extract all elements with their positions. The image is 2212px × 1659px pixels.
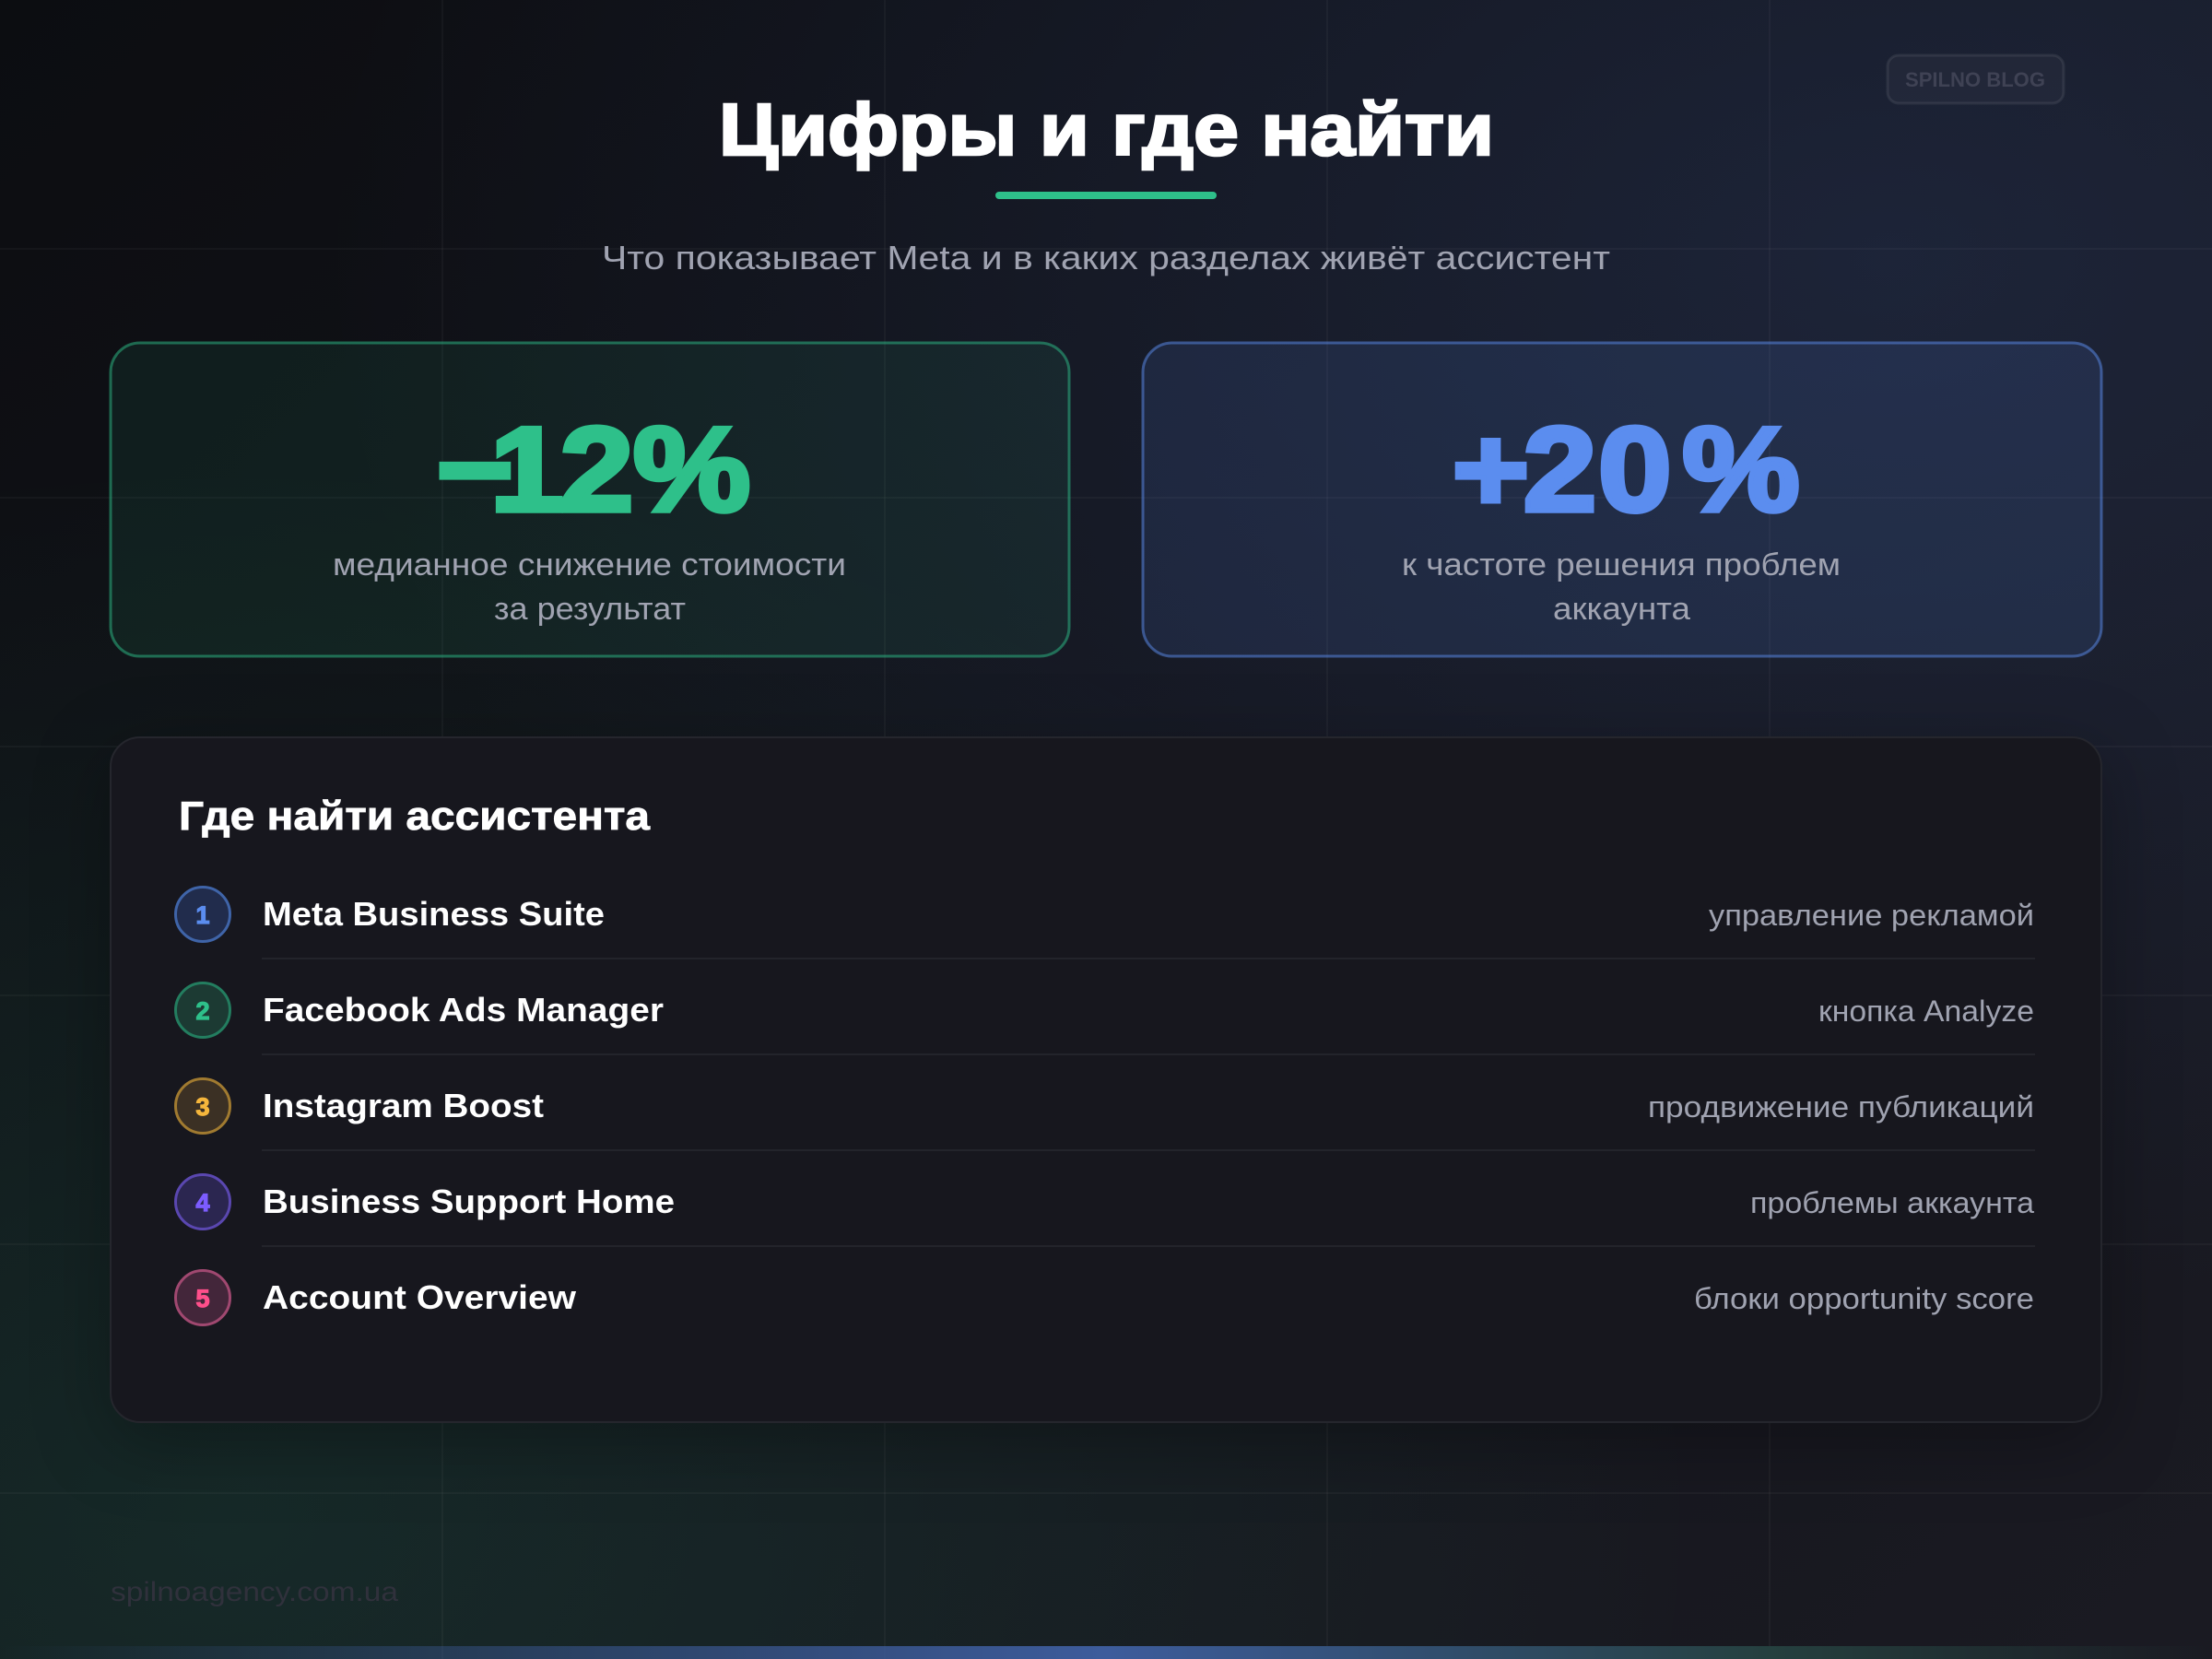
number badge 5 — [175, 1270, 230, 1325]
subtitle: Что показывает Meta и в каких разделах живёт ассистент — [602, 239, 1610, 276]
title underline — [995, 192, 1217, 199]
row 3 note: продвижение публикаций — [1648, 1090, 2034, 1124]
row 4 note: проблемы аккаунта — [1750, 1186, 2034, 1219]
row 4 name: Business Support Home — [263, 1182, 675, 1220]
row 2 name: Facebook Ads Manager — [263, 991, 664, 1029]
panel: where to find the assistant — [111, 737, 2101, 1422]
number badge 2 — [175, 982, 230, 1038]
panel: stat −12% — [111, 343, 1069, 656]
number badge 3: 3 — [195, 1093, 210, 1121]
row 2 note: кнопка Analyze — [1818, 994, 2034, 1028]
footer url: spilnoagency.com.ua — [111, 1577, 398, 1607]
row 5 name: Account Overview — [263, 1278, 577, 1316]
row 5 — [175, 1270, 2034, 1325]
panel heading: Где найти ассистента — [179, 794, 651, 839]
number badge 4 — [175, 1174, 230, 1230]
title: Цифры и где найти — [719, 88, 1494, 171]
row 3 name: Instagram Boost — [263, 1087, 544, 1124]
row 2 — [175, 982, 2034, 1038]
stat caption line 1: к частоте решения проблем — [1402, 547, 1841, 582]
panel: stat +20% — [1143, 343, 2101, 656]
row 4 — [175, 1174, 2034, 1230]
stat caption line 2: за результат — [494, 592, 686, 627]
badge: SPILNO BLOG: SPILNO BLOG — [1905, 68, 2045, 91]
row 5 note: блоки opportunity score — [1694, 1282, 2034, 1315]
row 1 — [175, 887, 2034, 942]
stat number −12%: −12% — [437, 402, 750, 536]
number badge 1 — [175, 887, 230, 942]
number badge 2: 2 — [195, 997, 210, 1025]
row 1 name: Meta Business Suite — [263, 895, 605, 933]
stat number +20%: +20% — [1453, 402, 1800, 536]
bottom gradient bar — [0, 1646, 2212, 1659]
number badge 1: 1 — [195, 901, 210, 929]
badge: SPILNO BLOG — [1888, 55, 2064, 103]
number badge 4: 4 — [195, 1189, 210, 1217]
stat caption line 1: медианное снижение стоимости — [333, 547, 846, 582]
row 1 note: управление рекламой — [1709, 899, 2034, 932]
row 3 — [175, 1078, 2034, 1134]
number badge 3 — [175, 1078, 230, 1134]
stat caption line 2: аккаунта — [1553, 592, 1690, 627]
number badge 5: 5 — [195, 1285, 210, 1312]
